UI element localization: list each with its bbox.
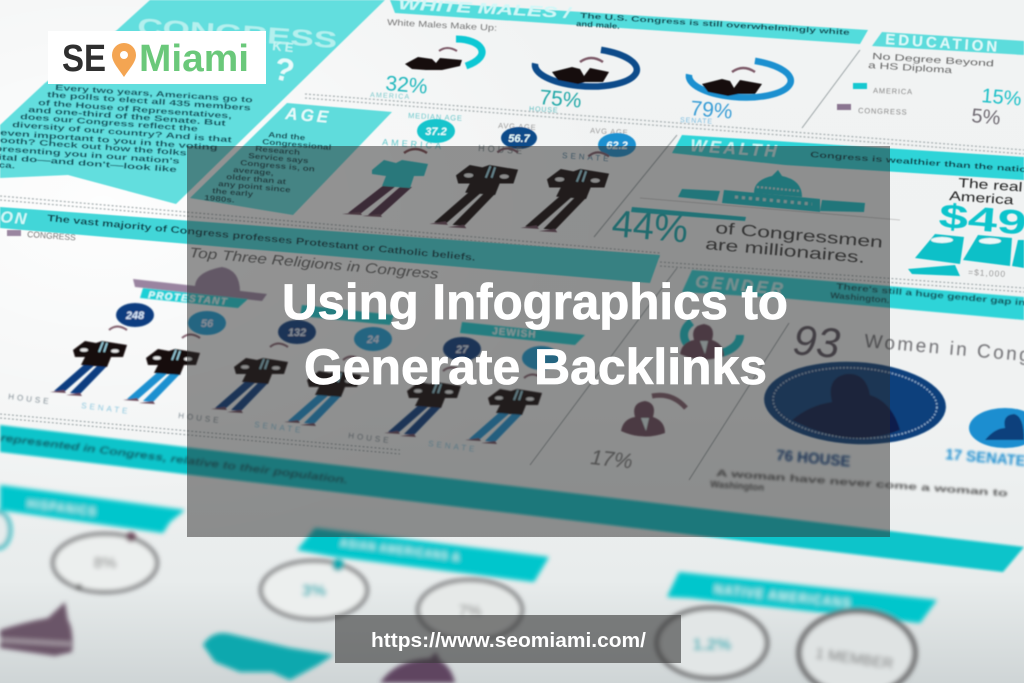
wealth heading: WEALTH bbox=[690, 136, 780, 161]
stat: 75%: 75% bbox=[539, 86, 582, 113]
icon: woman in purple arc bbox=[621, 395, 686, 437]
panel: white males bbox=[370, 0, 868, 126]
age paragraph: Congress is, on bbox=[240, 158, 315, 173]
education heading: EDUCATION bbox=[885, 31, 1001, 56]
stat: 32%: 32% bbox=[385, 72, 428, 99]
bubble: 37.2: 37.2 bbox=[425, 126, 447, 138]
title: Generate Backlinks bbox=[304, 339, 767, 395]
logo bbox=[48, 31, 266, 84]
labels: house senate: SENATE bbox=[428, 439, 478, 454]
figure: protestant house bbox=[50, 326, 127, 396]
labels: house senate: HOUSE bbox=[348, 431, 392, 445]
label: avg age senate: AVG AGE bbox=[590, 126, 629, 137]
band text: represented in Congress, relative to their population. bbox=[0, 432, 349, 487]
panel: wealth: America bbox=[949, 189, 1014, 208]
ribbon: protestant: PROTESTANT bbox=[148, 290, 228, 308]
icon: capitol left bbox=[0, 602, 72, 656]
bubble: 248 bbox=[116, 303, 154, 327]
intro paragraph: and one-third of the Senate. But bbox=[28, 105, 227, 128]
white males band bbox=[390, 0, 868, 44]
panel: gender bbox=[589, 270, 1024, 473]
ring: 8% bbox=[53, 532, 157, 592]
panel: education bbox=[837, 31, 1024, 130]
stat: 15%: 15% bbox=[981, 85, 1023, 110]
intro paragraph: Every two years, Americans go to bbox=[55, 83, 253, 105]
age paragraph: Research bbox=[255, 144, 300, 157]
age paragraph: 1980s. bbox=[204, 193, 235, 204]
stat: 79%: 79% bbox=[690, 97, 733, 124]
icon: capitol bbox=[678, 170, 865, 212]
circle: senate women bbox=[969, 408, 1024, 448]
url bar bbox=[335, 615, 681, 663]
figure: catholic house bbox=[211, 344, 288, 413]
icon: woman in teal ring bbox=[680, 316, 740, 360]
stat: 76 house: 76 HOUSE bbox=[776, 447, 851, 470]
age paragraph: the early bbox=[212, 186, 254, 198]
label: avg age house: AVG AGE bbox=[498, 121, 537, 132]
bubble: 62.2: 62.2 bbox=[606, 140, 628, 152]
gender band text: There's still a huge gender gap in bbox=[836, 282, 1024, 307]
panel: religions figures bbox=[8, 267, 585, 454]
ring: 7%: 7% bbox=[458, 603, 482, 620]
intro paragraph: of the House of Representatives, bbox=[38, 98, 232, 121]
labels: house senate: SENATE bbox=[81, 401, 131, 416]
thin divider lines bbox=[530, 50, 860, 480]
ribbon: catholic bbox=[300, 305, 394, 325]
panel: gender lower text bbox=[0, 425, 1024, 572]
wealth text: of Congressmen bbox=[715, 219, 884, 251]
bubble: 132: 132 bbox=[288, 327, 306, 339]
ribbon: protestant bbox=[140, 288, 248, 308]
stat: 17 senate: 17 SENATE bbox=[945, 446, 1024, 470]
figure: catholic senate bbox=[284, 356, 361, 426]
ribbon: right: NATIVE AMERICANS bbox=[714, 582, 852, 610]
label: senate: SENATE bbox=[562, 151, 612, 163]
sub heading: White Males Make Up: bbox=[387, 17, 497, 33]
bubble: 27: 27 bbox=[455, 344, 469, 356]
age paragraph: And the bbox=[268, 130, 306, 142]
age heading: AGE bbox=[284, 104, 332, 127]
labels: house senate bbox=[8, 392, 478, 454]
ring: left partial bbox=[0, 512, 10, 548]
figure: america bbox=[342, 149, 428, 217]
ring: 3% teal bbox=[261, 559, 367, 619]
religion band text: The vast majority of Congress professes Protestant or Catholic beliefs. bbox=[47, 214, 476, 263]
ribbon: right bbox=[667, 572, 937, 623]
stat: 17%: 17% bbox=[589, 446, 634, 473]
bubble: 37.2 bbox=[417, 119, 455, 143]
stat: 44%: 44% bbox=[610, 203, 690, 252]
text: the real: The real bbox=[958, 176, 1023, 195]
labels: house senate: SENATE bbox=[254, 420, 304, 435]
label: median age: MEDIAN AGE bbox=[408, 111, 463, 123]
icon: capitol purple bbox=[133, 267, 267, 301]
intro paragraph: the polls to elect all 435 members bbox=[47, 90, 251, 113]
bubble: 27 bbox=[443, 337, 481, 361]
wealth text bbox=[705, 219, 884, 266]
panel: gender: Washington. bbox=[830, 291, 890, 305]
bubble: 56 bbox=[188, 311, 226, 335]
age paragraph: Congressional bbox=[262, 137, 332, 152]
icon: map pin bbox=[112, 43, 136, 77]
panel: congress intro banner bbox=[0, 0, 385, 204]
intro paragraph bbox=[0, 83, 253, 175]
band text: The U.S. Congress is still overwhelmingly white bbox=[580, 11, 850, 37]
ribbon: hispanics bbox=[0, 485, 185, 533]
ring: 1 member: 1 MEMBER bbox=[814, 645, 895, 673]
panel: religion bbox=[0, 207, 660, 283]
gender note: A woman have never come a woman to bbox=[716, 468, 1008, 499]
figure: house bbox=[430, 148, 518, 228]
icon: capitol bottom bbox=[380, 652, 455, 683]
panel: white males: and male. bbox=[576, 19, 620, 31]
ring: 1 member bbox=[799, 611, 915, 683]
legend: congress bbox=[837, 104, 908, 117]
bubble: 24 bbox=[354, 327, 392, 351]
ribbon: hispanics: HISPANICS bbox=[27, 498, 97, 518]
legend: congress: CONGRESS bbox=[858, 106, 908, 117]
label: house: HOUSE bbox=[529, 106, 559, 115]
intro paragraph: diversity of our country? And is that bbox=[12, 120, 233, 145]
age paragraph: Service says bbox=[248, 151, 309, 165]
label: senate: SENATE bbox=[680, 117, 713, 126]
ring: 1.2% bbox=[657, 608, 767, 678]
wealth band bbox=[672, 135, 1024, 180]
figure: protestant senate bbox=[123, 334, 200, 404]
legend: america: AMERICA bbox=[873, 86, 913, 96]
label: america: AMERICA bbox=[370, 92, 411, 101]
bubble: 62.2 bbox=[598, 133, 636, 157]
ring: 7% bbox=[418, 580, 522, 640]
panel: education: a HS Diploma bbox=[868, 60, 952, 75]
labels: house senate: HOUSE bbox=[178, 411, 222, 425]
ring: america bbox=[405, 39, 482, 70]
ribbon: middle bbox=[297, 528, 549, 582]
label: america: AMERICA bbox=[382, 137, 444, 151]
age paragraph: average, bbox=[233, 165, 274, 177]
gender heading: GENDER bbox=[695, 272, 787, 299]
ring: 3% teal: 3% bbox=[302, 581, 326, 600]
title: Using Infographics to bbox=[282, 274, 788, 330]
title bbox=[282, 274, 788, 395]
bubble: 56.7 bbox=[501, 127, 537, 149]
ring: 8%: 8% bbox=[93, 555, 117, 572]
heading: congress: CONGRESS bbox=[137, 14, 338, 53]
age paragraph: any point since bbox=[218, 179, 291, 194]
wealth band text: Congress is wealthier than the nation bbox=[810, 150, 1024, 174]
icon: usa map bbox=[203, 633, 333, 680]
stat: 93: 93 bbox=[791, 316, 842, 367]
legend: congress: CONGRESS bbox=[27, 229, 76, 242]
age box bbox=[190, 103, 392, 215]
question mark: ? bbox=[270, 50, 298, 90]
age paragraph bbox=[204, 130, 332, 204]
ring: senate bbox=[688, 57, 792, 100]
figure: jewish house bbox=[384, 368, 461, 437]
icons: money bags bbox=[908, 234, 1024, 276]
intro paragraph: does our Congress reflect the bbox=[20, 112, 198, 134]
ribbon: jewish: JEWISH bbox=[492, 326, 537, 341]
ribbon: jewish bbox=[460, 322, 585, 345]
religion heading fragment: ON bbox=[0, 209, 29, 228]
overlay panel bbox=[187, 146, 890, 537]
label: house: HOUSE bbox=[478, 143, 525, 156]
bubble: 248: 248 bbox=[125, 310, 145, 322]
bubble: 56.7: 56.7 bbox=[508, 133, 531, 145]
population band bbox=[0, 425, 1024, 572]
labels: house senate: HOUSE bbox=[8, 392, 52, 406]
bubble: 132 bbox=[278, 320, 316, 344]
education text: No Degree Beyond bbox=[872, 51, 994, 68]
circle: house women bbox=[762, 357, 948, 449]
legend: america bbox=[853, 83, 913, 96]
education band bbox=[872, 32, 1024, 55]
figure: jewish senate bbox=[465, 374, 542, 444]
panel: age bbox=[190, 103, 636, 232]
bubble: jewish senate bbox=[522, 346, 560, 370]
wealth text: are millionaires. bbox=[705, 235, 866, 266]
logo text: SE: SE bbox=[62, 38, 106, 80]
religion band bbox=[0, 207, 660, 283]
bar: 44% bbox=[631, 207, 746, 221]
dotted dividers bbox=[0, 94, 1024, 454]
age paragraph: older than at bbox=[226, 172, 286, 186]
bubble: 56: 56 bbox=[201, 318, 214, 330]
bubble: 24: 24 bbox=[366, 334, 379, 346]
ribbon: middle: ASIAN AMERICANS & bbox=[340, 538, 461, 564]
ring: 1.2%: 1.2% bbox=[693, 635, 731, 654]
panel: wealth bbox=[610, 135, 1024, 279]
intro paragraph: even important to you in the voting bbox=[0, 128, 218, 153]
sub heading: top three: Top Three Religions in Congress bbox=[189, 244, 439, 282]
panel: lower ribbons and circles bbox=[0, 485, 937, 683]
label: $1,000: =$1,000 bbox=[968, 267, 1006, 279]
panel: gender lower text: Washington bbox=[710, 479, 765, 494]
logo text: Miami: Miami bbox=[139, 38, 249, 80]
ring: house bbox=[534, 46, 638, 89]
gender band bbox=[682, 270, 1024, 320]
stat: 5%: 5% bbox=[971, 105, 1001, 130]
heading: look like: KE bbox=[272, 38, 297, 55]
url text: https://www.seomiami.com/ bbox=[371, 630, 646, 652]
figure: senate bbox=[520, 152, 609, 232]
